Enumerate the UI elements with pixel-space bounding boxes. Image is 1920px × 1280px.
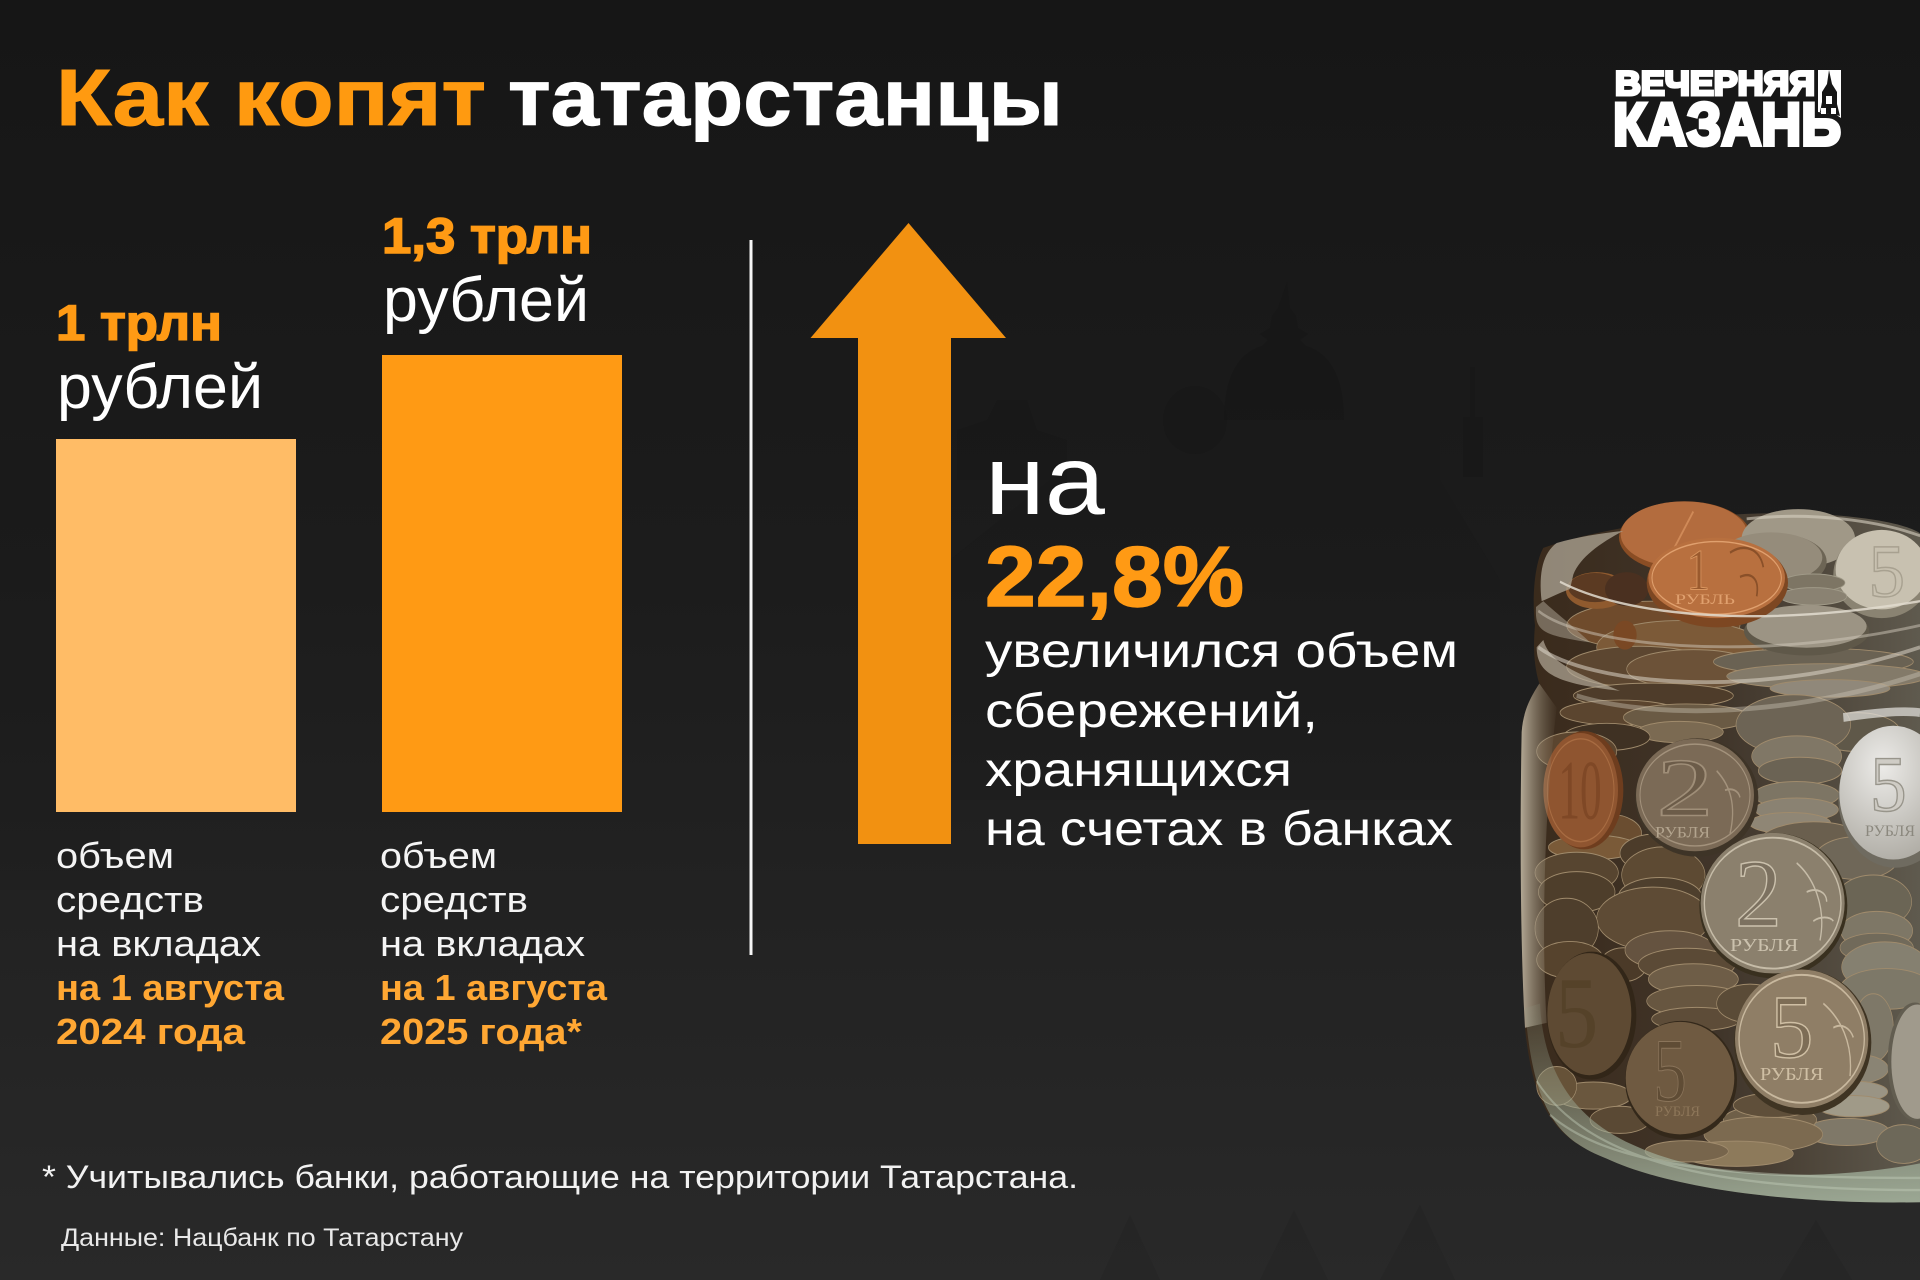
coin: large two roubles (1699, 833, 1847, 978)
jar neck and rim (1536, 516, 1920, 718)
coin: brown five bottom (1625, 1020, 1737, 1139)
caption: 2025 bar: объем (380, 835, 497, 876)
coin: top copper one rouble: 1 (1687, 538, 1710, 602)
illustration: glass jar with coins (1521, 501, 1920, 1203)
coin: large two roubles: РУБЛЯ (1730, 936, 1799, 956)
value label: 2025: 1,3 трлн (382, 208, 592, 264)
value label: 2024: рублей (57, 353, 263, 422)
coin: two roubles back (1635, 738, 1758, 857)
caption: 2025 bar (380, 835, 608, 1052)
background: city skyline silhouette (0, 282, 1852, 1280)
caption: 2025 bar: 2025 года* (380, 1011, 582, 1052)
bar chart: savings comparison (56, 355, 622, 812)
growth callout: на (985, 425, 1106, 535)
coin: two roubles back: 2 (1657, 743, 1713, 834)
coin: brown five bottom: РУБЛЯ (1655, 1103, 1700, 1119)
caption: 2024 bar (56, 835, 285, 1052)
source: Данные: Нацбанк по Татарстану (61, 1224, 464, 1252)
coin: top left dark copper (1566, 572, 1648, 650)
jar body (1521, 513, 1920, 1203)
coin: silver five right: РУБЛЯ (1865, 822, 1915, 840)
value label: 2024: 1 трлн (56, 295, 222, 351)
coin: two roubles back: РУБЛЯ (1655, 824, 1710, 841)
caption: 2024 bar: 2024 года (56, 1011, 246, 1052)
coin: large two roubles: 2 (1735, 840, 1782, 947)
growth callout: хранящихся (985, 744, 1292, 797)
caption: 2025 bar: на 1 августа (380, 967, 608, 1008)
coin: silver five right (1838, 726, 1920, 868)
coin: large five roubles (1734, 970, 1871, 1115)
coin: large five roubles: 5 (1770, 976, 1813, 1077)
logo: Вечерняя Казань: ВЕЧЕРНЯЯ (1615, 65, 1815, 103)
value label: 2025: рублей (383, 266, 589, 335)
growth callout: увеличился объем (985, 625, 1458, 678)
growth callout (985, 425, 1458, 856)
title: Как копят (56, 53, 486, 142)
coin: top copper one rouble (1647, 538, 1788, 627)
jar glass: side and bottom reflections (1521, 684, 1920, 1203)
coin: copper ten: 10 (1558, 743, 1602, 837)
growth callout: 22,8% (985, 530, 1244, 625)
growth callout: на счетах в банках (985, 803, 1453, 856)
coin: top silver stack (1780, 574, 1847, 605)
coin: brown five left: 5 (1555, 956, 1598, 1069)
coin: top back copper (1619, 501, 1751, 573)
caption: 2024 bar: средств (56, 879, 204, 920)
coin: top silver five (1833, 530, 1920, 618)
value label: 2024 (56, 295, 263, 422)
caption: 2024 bar: на 1 августа (56, 967, 285, 1008)
title: татарстанцы (508, 53, 1063, 142)
value label: 2025 (382, 208, 592, 335)
coin pile: stacked rims (1535, 601, 1920, 1166)
caption: 2024 bar: объем (56, 835, 174, 876)
logo: Вечерняя Казань (1613, 65, 1841, 158)
coin: top back silver (1719, 509, 1855, 590)
coin: top silver five: 5 (1868, 530, 1905, 613)
footnote: * Учитывались банки, работающие на территории Татарстана. (42, 1159, 1078, 1195)
bar: 2025 (382, 355, 622, 812)
arrow: growth (810, 223, 1006, 844)
coin: copper ten (1543, 731, 1623, 849)
coin: right edge silver (1888, 1003, 1920, 1121)
divider line (750, 240, 752, 955)
coin: brown five bottom: 5 (1653, 1020, 1687, 1120)
title (56, 53, 1063, 142)
logo: Вечерняя Казань: КАЗАНЬ (1613, 91, 1841, 158)
coin: silver five right: 5 (1870, 739, 1907, 828)
caption: 2025 bar: на вкладах (380, 923, 585, 964)
caption: 2025 bar: средств (380, 879, 528, 920)
coin: top copper one rouble: РУБЛЬ (1675, 591, 1735, 608)
coin: brown five left (1547, 952, 1636, 1080)
coin: top flat silver (1744, 605, 1869, 655)
coin: large five roubles: РУБЛЯ (1760, 1066, 1823, 1085)
growth callout: сбережений, (985, 685, 1318, 738)
caption: 2024 bar: на вкладах (56, 923, 261, 964)
bar: 2024 (56, 439, 296, 812)
